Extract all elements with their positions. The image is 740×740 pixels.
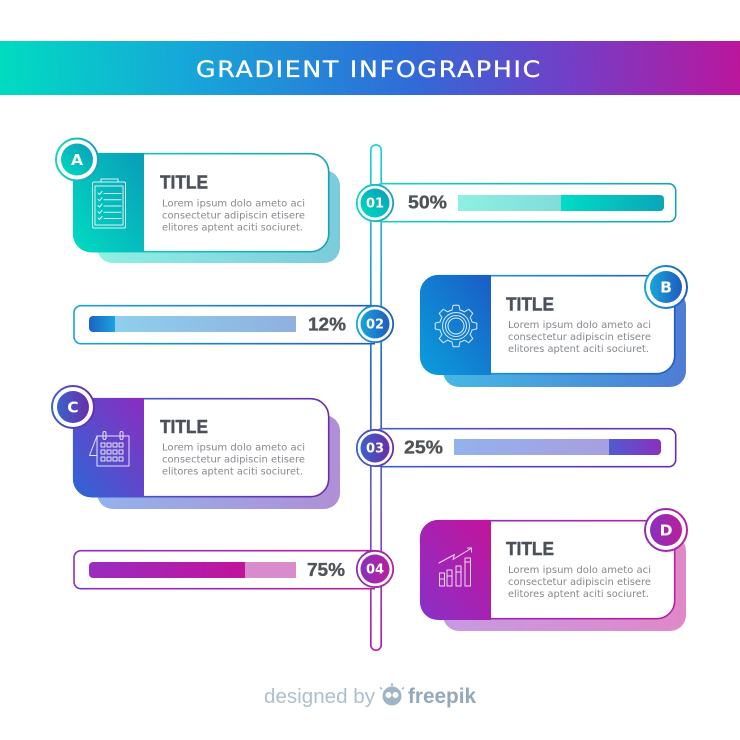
card B body text — [508, 320, 651, 355]
bar 02 frame — [74, 306, 375, 344]
bar 02 remaining — [114, 316, 296, 332]
card B body — [421, 276, 675, 374]
card D body text — [508, 565, 651, 600]
footer credit — [264, 683, 476, 708]
bar 04 fill — [89, 562, 245, 578]
bar 03 value: 25% — [404, 438, 443, 458]
badge 02 — [357, 306, 393, 342]
badge B: B — [660, 278, 672, 296]
card C body text — [162, 442, 305, 478]
icon: freepik mascot — [380, 683, 404, 706]
card A body — [74, 154, 329, 252]
card D icon panel — [420, 520, 491, 620]
card A body text — [162, 198, 305, 234]
card B backing shadow — [443, 290, 686, 387]
banner heading: GRADIENT INFOGRAPHIC — [196, 58, 542, 83]
badge A: A — [71, 151, 83, 169]
card A body text: consectetur adipiscin etisere — [162, 210, 305, 222]
badge D: D — [660, 522, 673, 540]
card D body text: Lorem ipsum dolo ameto aci — [508, 565, 651, 576]
icon: clipboard — [92, 179, 126, 228]
bar 02 fill — [89, 316, 115, 332]
card A icon panel — [73, 153, 144, 252]
card B body text: consectetur adipiscin etisere — [508, 332, 651, 343]
bar 01 fill — [561, 195, 664, 211]
icon: gear — [435, 305, 477, 347]
bar 03 fill — [609, 439, 661, 455]
card A body text: Lorem ipsum dolo ameto aci — [162, 198, 305, 210]
badge 01 — [357, 185, 393, 221]
vertical timeline track — [371, 145, 381, 650]
title banner — [0, 41, 740, 95]
credit text: designed by — [264, 686, 375, 708]
card B title: TITLE — [506, 294, 554, 314]
card C icon panel — [73, 398, 144, 497]
bar 04 remaining — [244, 562, 296, 578]
card C body — [74, 399, 329, 497]
badge 02: 02 — [366, 318, 384, 333]
bar 04 frame — [74, 551, 375, 589]
badge 03 — [357, 430, 393, 466]
badge A — [56, 138, 98, 180]
badge B — [645, 266, 687, 308]
badge C — [52, 386, 94, 428]
panel: progress bar 04 — [74, 551, 393, 589]
card D backing shadow — [443, 535, 686, 631]
bar 02 value: 12% — [308, 314, 346, 334]
bar 04 value: 75% — [307, 560, 345, 580]
panel: progress bar 02 — [74, 306, 393, 344]
panel: card D — [420, 509, 687, 631]
icon: bar chart with arrow — [439, 548, 472, 586]
bar 01 value: 50% — [408, 192, 447, 212]
card D body text: consectetur adipiscin etisere — [508, 577, 651, 588]
bar 01 frame — [376, 184, 676, 222]
bar 03 remaining — [454, 439, 610, 455]
panel: card B — [420, 266, 687, 387]
card D title: TITLE — [506, 539, 554, 559]
card C title: TITLE — [160, 417, 208, 437]
badge 04 — [357, 551, 393, 587]
card B body text: Lorem ipsum dolo ameto aci — [508, 320, 651, 331]
panel: card C — [52, 386, 340, 509]
card D body text: elitores aptent aciti sociuret. — [508, 589, 649, 600]
card A body text: elitores aptent aciti sociuret. — [162, 222, 303, 234]
card C body text: Lorem ipsum dolo ameto aci — [162, 442, 305, 454]
panel: card A — [56, 138, 340, 263]
card A title: TITLE — [160, 172, 208, 192]
card C body text: elitores aptent aciti sociuret. — [162, 466, 303, 478]
card C backing shadow — [97, 415, 340, 509]
card C body text: consectetur adipiscin etisere — [162, 454, 305, 466]
freepik wordmark: freepik — [408, 685, 476, 708]
icon: calendar — [90, 432, 129, 466]
card D body — [421, 521, 675, 619]
bar 01 remaining — [458, 195, 562, 211]
panel: progress bar 01 — [357, 184, 676, 222]
badge C: C — [67, 398, 79, 416]
badge 03: 03 — [366, 442, 384, 457]
card A backing shadow — [97, 170, 340, 263]
card B icon panel — [420, 275, 491, 375]
badge D — [645, 509, 687, 551]
bar 03 frame — [376, 429, 676, 467]
badge 04: 04 — [366, 563, 384, 578]
panel: progress bar 03 — [357, 429, 676, 467]
card B body text: elitores aptent aciti sociuret. — [508, 344, 649, 355]
badge 01: 01 — [366, 197, 384, 212]
